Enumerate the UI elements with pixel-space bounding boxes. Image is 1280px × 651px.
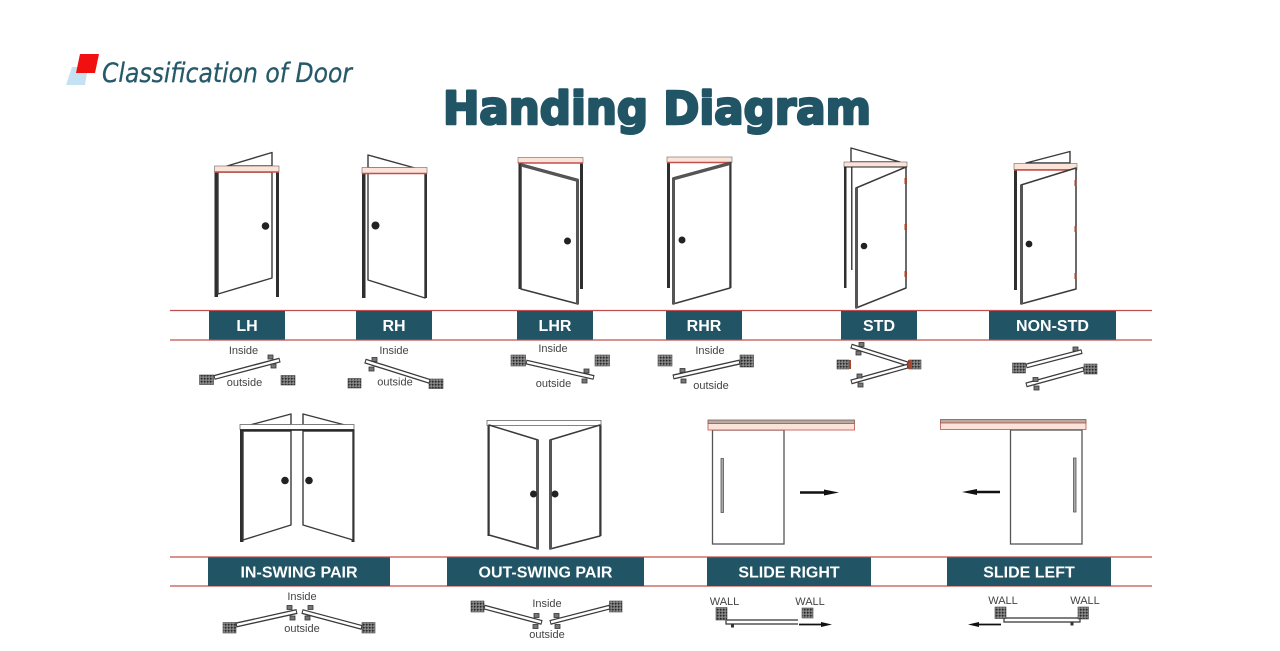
door: LHR [518, 158, 583, 304]
plan: in-swing pair [223, 591, 375, 635]
door: NON-STD [1014, 152, 1077, 304]
door: slide right [708, 420, 854, 544]
plan: RHR: Inside [695, 345, 725, 357]
logo icon [66, 54, 99, 85]
plan: RH: outside [377, 376, 413, 388]
label: slide right: SLIDE RIGHT [738, 564, 840, 582]
label: in-swing pair: IN-SWING PAIR [240, 564, 358, 582]
plan: LHR [511, 343, 610, 390]
plan: slide left [968, 595, 1100, 627]
label: slide left [947, 558, 1111, 586]
door: LH [214, 152, 279, 297]
label: out-swing pair: OUT-SWING PAIR [479, 564, 613, 582]
label: LHR: LHR [539, 318, 572, 335]
label: slide left: SLIDE LEFT [983, 564, 1075, 582]
plan: LHR: outside [536, 378, 571, 390]
plan: RH: Inside [379, 345, 409, 357]
label: NON-STD: NON-STD [1016, 318, 1089, 335]
section heading: Classification of Door [102, 58, 354, 89]
door: in-swing pair [240, 414, 354, 542]
label: in-swing pair [208, 558, 390, 586]
plan: LHR: Inside [538, 343, 568, 355]
label: LHR [517, 311, 593, 340]
label: LH [209, 311, 285, 340]
door: out-swing pair [487, 420, 602, 549]
door: STD [844, 148, 907, 308]
door: RH [362, 155, 427, 298]
label: NON-STD [989, 311, 1116, 340]
label: RHR [666, 311, 742, 340]
label: RH: RH [382, 318, 406, 335]
plan: out-swing pair: outside [529, 629, 565, 641]
plan: LH: outside [227, 377, 262, 389]
door: slide left [940, 420, 1086, 544]
label: out-swing pair [447, 558, 644, 586]
label: STD: STD [863, 318, 895, 335]
label: slide right [707, 558, 871, 586]
plan: RHR: outside [693, 380, 729, 392]
plan: in-swing pair: outside [284, 623, 320, 635]
plan: slide left: WALL [1070, 595, 1100, 607]
label: LH: LH [236, 318, 258, 335]
plan: NON-STD [1012, 347, 1097, 390]
title: Handing Diagram [443, 82, 871, 135]
label: RH [356, 311, 432, 340]
arrow: slide left [962, 489, 1000, 495]
plan: slide left: WALL [988, 595, 1018, 607]
plan: STD [837, 342, 921, 387]
plan: LH [200, 345, 295, 389]
plan: LH: Inside [229, 345, 258, 357]
plan: RHR [658, 345, 754, 392]
label: RHR: RHR [687, 318, 722, 335]
plan: RH [348, 345, 443, 388]
plan: out-swing pair: Inside [532, 598, 562, 610]
plan: slide right: WALL [795, 596, 825, 608]
arrow: slide right [800, 490, 839, 496]
label: STD [841, 311, 917, 340]
plan: out-swing pair [471, 598, 622, 641]
plan: slide right [710, 596, 832, 628]
plan: in-swing pair: Inside [287, 591, 317, 603]
plan: slide right: WALL [710, 596, 739, 608]
door: RHR [667, 157, 732, 304]
